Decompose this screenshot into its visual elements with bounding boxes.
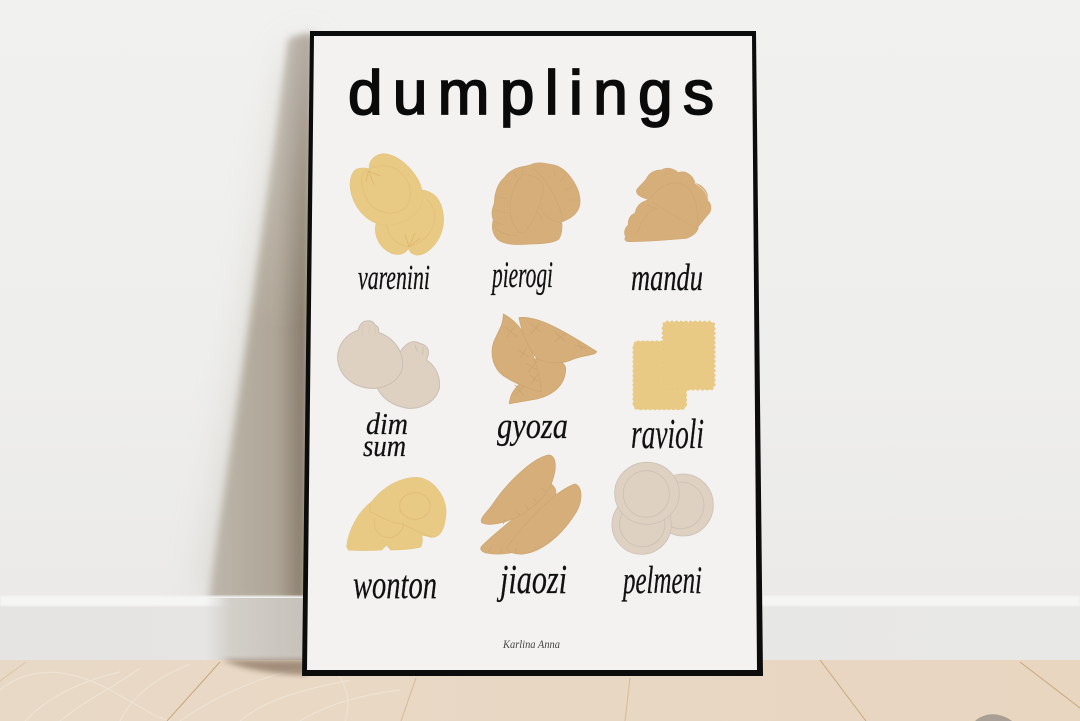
dumpling: pelmeni [612,462,713,554]
label: dim sum [363,406,408,463]
dumpling: dim sum [338,321,440,408]
background: wooden floor [0,660,1080,721]
dumpling: gyoza [492,314,597,404]
label: mandu: mandu [631,257,703,299]
dumpling: pierogi [492,163,580,245]
label: pelmeni: pelmeni [621,559,702,602]
dumpling: jiaozi [481,455,581,554]
background: baseboard [0,596,1080,661]
label: gyoza: gyoza [497,406,568,447]
poster frame [302,31,763,676]
label: jiaozi: jiaozi [496,556,567,602]
dumpling: varenini [350,154,444,255]
poster paper [307,36,757,670]
title: dumplings [348,59,714,128]
label: dim sum: sum [363,428,406,463]
dumpling: ravioli [634,322,714,408]
signature: Karlina Anna [502,637,560,651]
label: varenini: varenini [358,258,430,297]
dumpling: wonton [347,477,446,550]
label: pierogi: pierogi [490,255,553,296]
dumpling: mandu [625,168,711,242]
frame shadow on wall [200,34,312,600]
label: ravioli: ravioli [631,412,704,458]
label: dim sum: dim [366,406,408,441]
label: wonton: wonton [353,562,437,607]
